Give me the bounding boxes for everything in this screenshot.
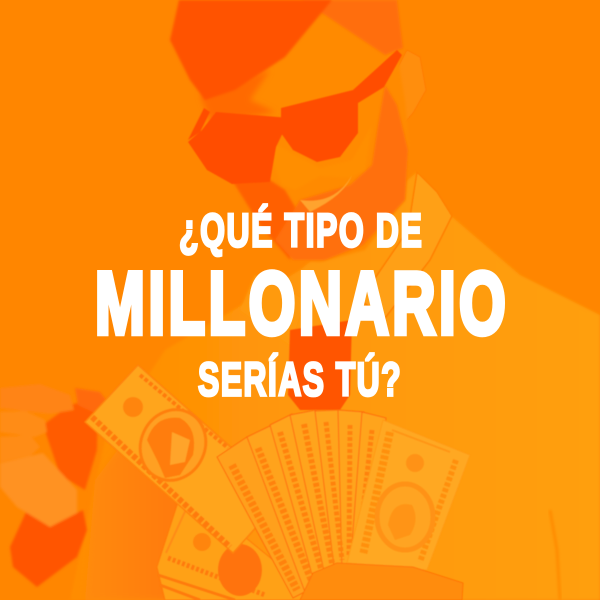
left lens bbox=[188, 112, 290, 184]
face bbox=[205, 10, 410, 262]
forehead shadow bbox=[200, 70, 275, 125]
nose shadow bbox=[232, 180, 300, 260]
ear bbox=[393, 50, 426, 128]
illustration: banknotes bbox=[85, 365, 470, 600]
left temple bbox=[188, 108, 210, 140]
top finger bbox=[0, 384, 74, 414]
sleeve fold bbox=[550, 510, 560, 600]
illustration: left hand bbox=[0, 384, 110, 587]
thumb bbox=[75, 388, 110, 413]
big right note bbox=[347, 420, 470, 570]
portrait bbox=[377, 484, 433, 550]
title line 2: MILLONARIO bbox=[95, 254, 506, 352]
left note bbox=[85, 365, 285, 553]
ring finger bbox=[0, 435, 40, 462]
torso shadow bbox=[85, 420, 270, 600]
collar left bbox=[240, 275, 305, 345]
title line 1: ¿QUÉ TIPO DE bbox=[179, 203, 422, 257]
cheek light bbox=[272, 125, 372, 190]
wrist shadow bbox=[10, 510, 87, 587]
fan blades bbox=[217, 410, 386, 598]
portrait bbox=[129, 399, 217, 491]
lower stack bbox=[157, 487, 310, 600]
sunglasses bbox=[188, 50, 402, 184]
right hand holding notes bbox=[300, 563, 463, 600]
hair right bbox=[300, 0, 403, 55]
right lens and temple bbox=[281, 50, 402, 162]
hair dark bbox=[170, 0, 332, 100]
dark palm shadow bbox=[43, 398, 98, 490]
palm bbox=[0, 453, 77, 527]
title bbox=[95, 203, 506, 406]
mouth bbox=[300, 175, 352, 212]
tie bbox=[288, 320, 352, 410]
collar bbox=[360, 172, 452, 318]
middle finger bbox=[0, 411, 47, 437]
beard bbox=[275, 85, 408, 260]
fan print strips bbox=[232, 422, 372, 590]
shirt bbox=[70, 172, 600, 600]
title line 3: SERÍAS TÚ? bbox=[198, 352, 401, 406]
